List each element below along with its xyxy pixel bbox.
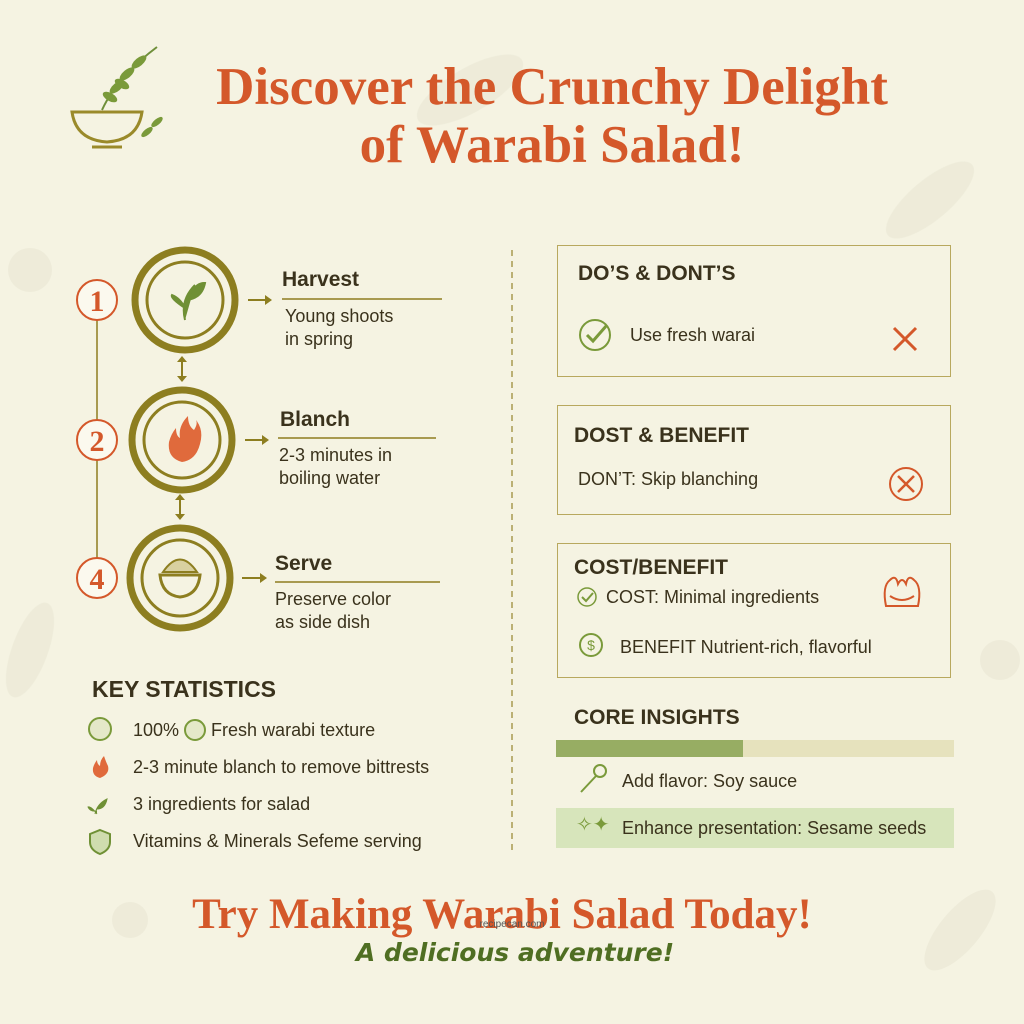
- process steps: Young shoots: [285, 306, 393, 326]
- process steps: 4: [90, 563, 104, 596]
- process steps: Harvest: [282, 268, 359, 291]
- process steps: Serve: [275, 552, 332, 575]
- panel: cost/benefit: COST/BENEFIT: [574, 556, 728, 579]
- footer call to action: recipecan.com: [479, 919, 545, 930]
- footer call to action: Try Making Warabi Salad Today!: [192, 891, 812, 938]
- footer call to action: [192, 891, 812, 967]
- panel: cost/benefit: [557, 543, 951, 678]
- process steps: as side dish: [275, 612, 370, 632]
- process steps: 2: [90, 425, 104, 458]
- panel: do's & dont's: DO’S & DONT’S: [578, 262, 736, 285]
- panel: cost/benefit: BENEFIT Nutrient-rich, flavorful: [620, 637, 872, 657]
- process steps: 2-3 minutes in: [279, 445, 392, 465]
- core insights: CORE INSIGHTS: [574, 706, 740, 729]
- process steps: boiling water: [279, 468, 380, 488]
- panel: do's & dont's: Use fresh warai: [630, 325, 755, 345]
- panel: dost & benefit: DOST & BENEFIT: [574, 424, 749, 447]
- key statistics: Vitamins & Minerals Sefeme serving: [133, 831, 422, 851]
- core insights: Add flavor: Soy sauce: [622, 771, 797, 791]
- title: [216, 58, 888, 174]
- panel: do's & dont's: [557, 245, 951, 377]
- key statistics: 100% Fresh warabi texture: [133, 720, 375, 740]
- process steps: [76, 246, 442, 632]
- process steps: Blanch: [280, 408, 350, 431]
- key statistics: 3 ingredients for salad: [133, 794, 310, 814]
- key statistics: 2-3 minute blanch to remove bittrests: [133, 757, 429, 777]
- process steps: in spring: [285, 329, 353, 349]
- logo icon: bowl with fern: [70, 46, 163, 148]
- title: of Warabi Salad!: [360, 116, 744, 174]
- process steps: Preserve color: [275, 589, 391, 609]
- key statistics: KEY STATISTICS: [92, 676, 276, 702]
- core insights: Enhance presentation: Sesame seeds: [622, 818, 926, 838]
- core insights: [556, 706, 954, 848]
- panel: cost/benefit: COST: Minimal ingredients: [606, 587, 819, 607]
- footer call to action: A delicious adventure!: [356, 938, 674, 967]
- core insights: ✧✦: [576, 814, 610, 836]
- title: Discover the Crunchy Delight: [216, 58, 888, 116]
- key statistics: [87, 676, 429, 856]
- panel: dost & benefit: DON’T: Skip blanching: [578, 469, 758, 489]
- panel: dost & benefit: [557, 405, 951, 515]
- process steps: 1: [90, 285, 104, 318]
- dashed divider: [511, 250, 513, 850]
- panel: cost/benefit: $: [587, 637, 595, 653]
